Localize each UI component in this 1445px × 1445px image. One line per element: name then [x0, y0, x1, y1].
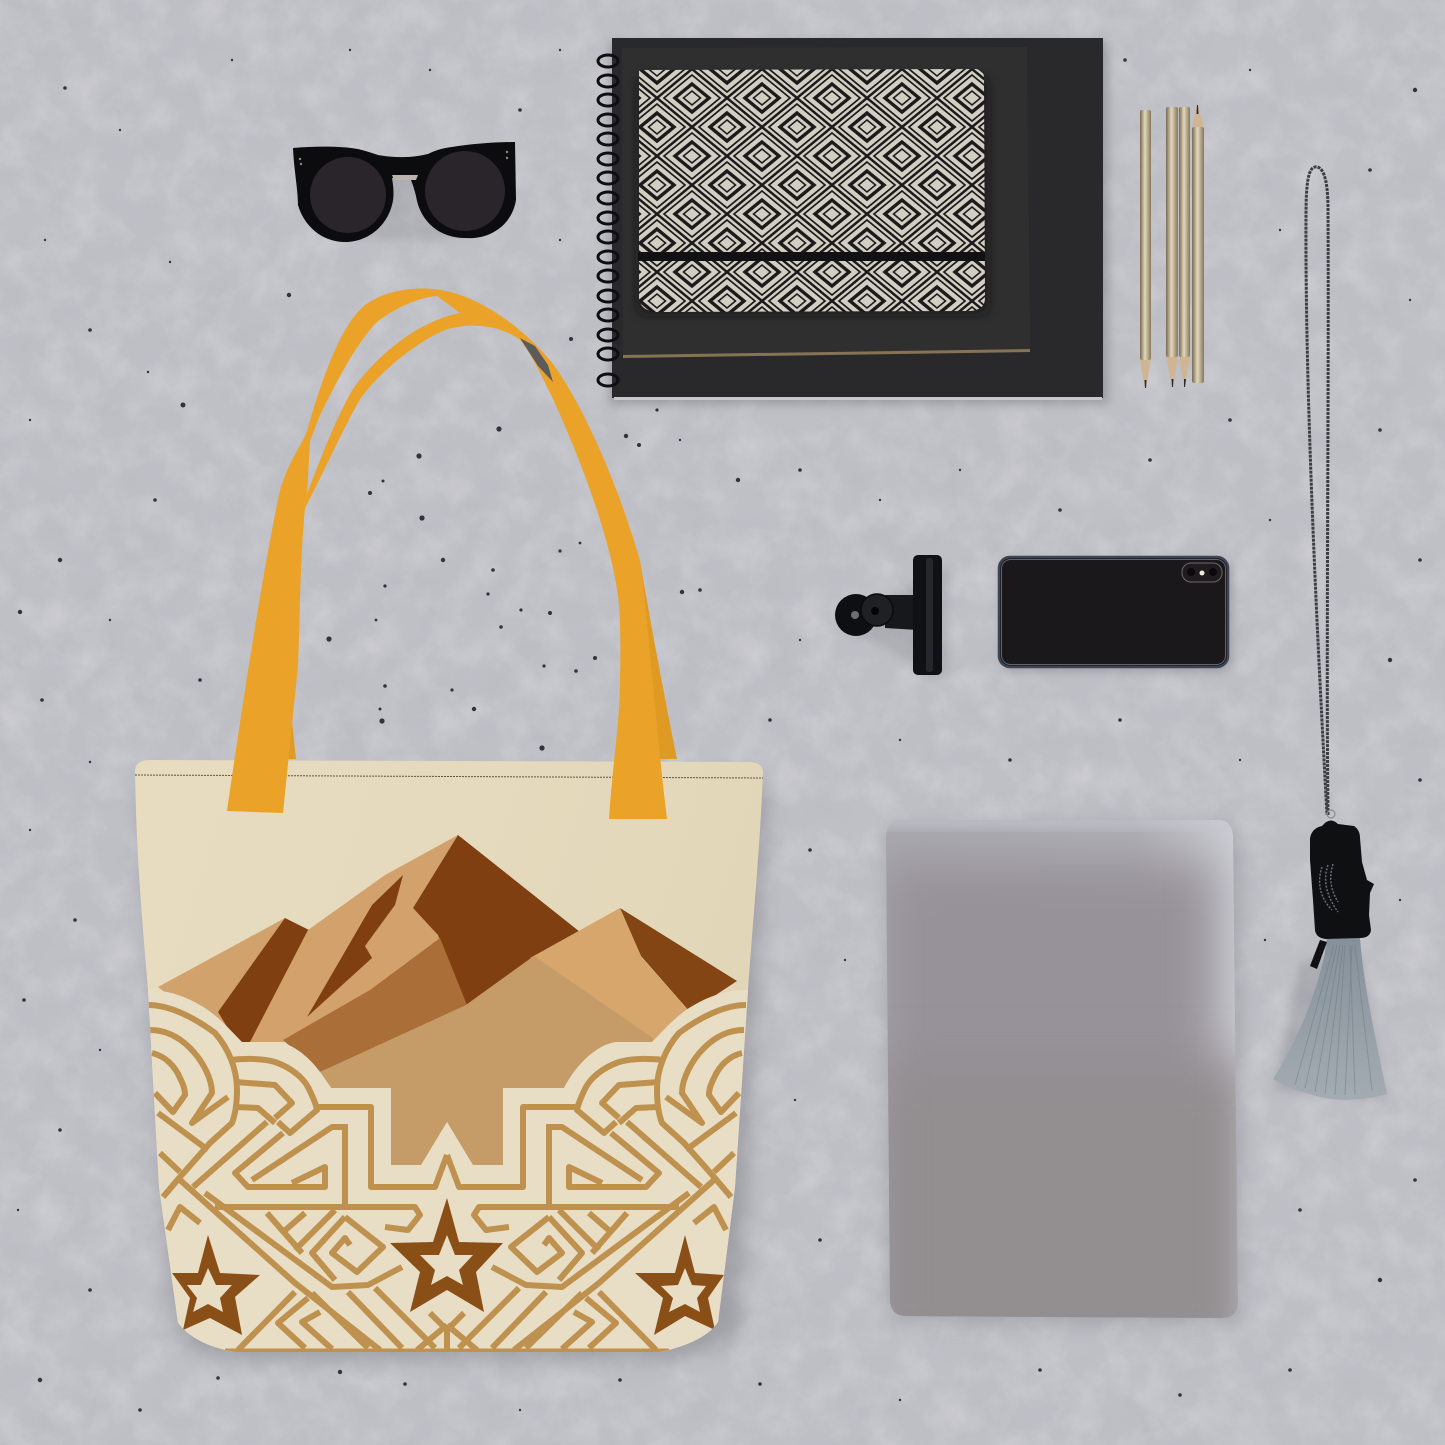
tassel shadow: [1275, 960, 1385, 1098]
mountain: far left slope: [158, 918, 285, 1026]
necklace chain: [1306, 167, 1328, 815]
smartphone: [999, 557, 1232, 671]
bag artwork: [148, 835, 748, 1352]
laptop central shading: [880, 860, 1215, 1360]
mountain: main lit face: [250, 835, 470, 1070]
handle strap gap: [520, 338, 553, 382]
tassel bead arcs: [1320, 864, 1338, 912]
sunglasses corner pins: [299, 151, 508, 165]
mountain: far left dark face: [218, 918, 309, 1045]
sunglasses: [293, 142, 516, 242]
clip back ring: [835, 594, 877, 636]
back handle left tail: [288, 722, 296, 759]
left star: [172, 1235, 260, 1335]
mountain: main dark face: [413, 835, 580, 1005]
mountain: rock crack: [307, 875, 403, 1017]
medium notebook tan edge: [623, 349, 1030, 358]
tassel strands: [1295, 945, 1372, 1095]
mountain: foreground slope: [320, 956, 660, 1170]
black beaded tassel head: [1310, 820, 1374, 939]
medium notebook: [622, 47, 1030, 356]
lattice ornament: right half mirrored: [447, 1005, 746, 1351]
notebook page edge: [614, 397, 1102, 400]
tote bag: [120, 288, 780, 1380]
laptop lid: [886, 820, 1238, 1318]
bag body: [135, 760, 763, 1352]
pencils: [1140, 105, 1204, 388]
phone inner edge: [1002, 560, 1226, 664]
front handles: [227, 288, 667, 819]
back handle right edge: [620, 560, 677, 759]
laptop top highlight: [888, 820, 1176, 830]
sunglasses lenses: [310, 151, 505, 233]
tassel black tab: [1310, 940, 1327, 969]
clip neck: [885, 595, 918, 630]
notebook stack: [598, 38, 1108, 404]
lattice ornament: left half: [148, 1005, 447, 1351]
spiral binding: [598, 55, 618, 386]
cream lattice field: [120, 988, 780, 1380]
pencil 3: [1179, 107, 1190, 387]
gray tassel fringe: [1273, 938, 1387, 1100]
pencil 1: [1140, 110, 1151, 388]
fabric notebook shadow: [636, 76, 990, 316]
clip body: [913, 555, 942, 675]
top stitching: [135, 775, 763, 778]
pencil 2: [1166, 107, 1178, 387]
fabric diamond-pattern notebook: [639, 69, 985, 312]
sunglasses frame: [293, 142, 516, 242]
center star: [390, 1198, 503, 1312]
right star: [635, 1235, 724, 1335]
mountain: shaded mid slope: [283, 938, 467, 1072]
necklace with tassel: [1273, 167, 1387, 1100]
sunglasses bridge: [392, 175, 418, 180]
phone body: [999, 557, 1228, 667]
necklace ring: [1327, 810, 1335, 818]
elastic band: [638, 252, 985, 261]
pencil 4: [1192, 105, 1204, 383]
clip disk: [861, 594, 893, 626]
binder clip: [835, 555, 948, 680]
laptop: [880, 815, 1245, 1360]
bag drop shadow: [140, 780, 768, 1360]
large black notebook: [612, 38, 1103, 398]
mountain: right dark face: [620, 908, 737, 1012]
phone camera: [1182, 563, 1222, 582]
mountain: right lit face: [530, 908, 690, 1043]
laptop lower shading: [888, 1041, 1238, 1318]
